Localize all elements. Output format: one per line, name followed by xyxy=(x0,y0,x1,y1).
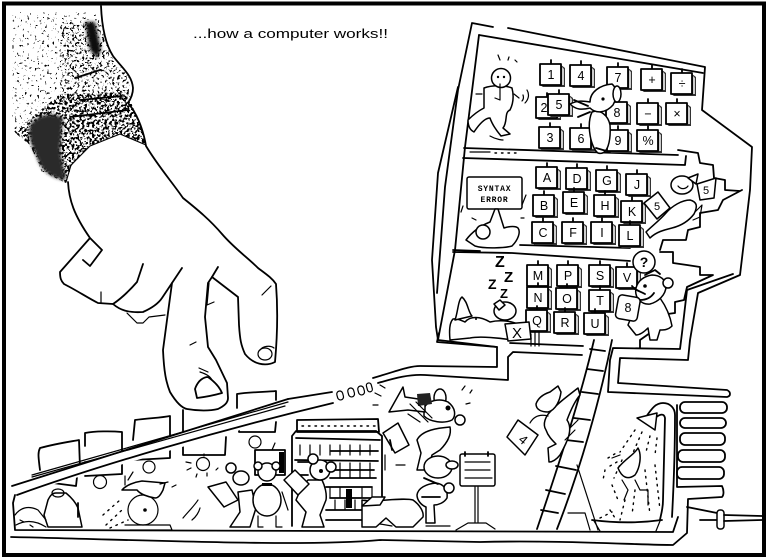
panel: middle room letter keys xyxy=(532,163,651,248)
key R: R xyxy=(560,316,570,330)
key 2 xyxy=(85,431,122,476)
panel: lower room letter keys xyxy=(526,261,641,336)
key O: O xyxy=(562,292,572,306)
key Q: Q xyxy=(532,314,542,328)
character: mouse with clipboard on the left of trumpeter xyxy=(383,423,409,470)
number key 7: 7 xyxy=(615,71,622,85)
slope band mask xyxy=(12,392,333,495)
minus key: − xyxy=(644,107,652,121)
number key 6: 6 xyxy=(578,132,585,146)
index finger xyxy=(163,277,228,410)
hand outline xyxy=(101,6,277,364)
panel: keyboard slope with keys xyxy=(12,382,373,495)
key V: V xyxy=(623,271,632,285)
key S: S xyxy=(596,269,604,283)
key D: D xyxy=(572,172,582,186)
character: mouse with book in front of bookcase xyxy=(284,454,336,527)
sleeping Zs: Z xyxy=(488,276,497,292)
character: mouse on ladder carrying clipboard xyxy=(507,386,580,462)
shelf 2 xyxy=(453,245,630,261)
character: mouse running up stairs with clipboards: 5 xyxy=(703,185,709,197)
key L: L xyxy=(627,229,634,243)
floor shelf 1 xyxy=(463,148,686,165)
key F: F xyxy=(569,226,577,240)
number key 4: 4 xyxy=(578,69,585,83)
radiator fins xyxy=(11,402,727,545)
key N: N xyxy=(533,291,543,305)
key C: C xyxy=(538,226,548,240)
title: ...how a computer works!! xyxy=(193,26,388,41)
sleeping Zs: Z xyxy=(504,269,513,286)
sleeping Zs: Z xyxy=(500,286,508,301)
key 5 xyxy=(237,391,276,432)
number key 8: 8 xyxy=(614,106,621,120)
number key 8 xyxy=(606,98,631,125)
sleeping Zs xyxy=(488,254,513,301)
ladder xyxy=(537,340,612,530)
multiply key: × xyxy=(673,107,681,121)
icon: giant hand pressing a key xyxy=(12,6,277,410)
key P: P xyxy=(564,269,572,283)
bulbs under keys xyxy=(94,436,261,488)
monitor on stand xyxy=(255,443,285,475)
character: mouse in hat under trumpeter xyxy=(417,456,458,526)
bathtub xyxy=(592,520,662,531)
key U: U xyxy=(590,317,600,331)
character: sleeping person xyxy=(450,297,520,340)
key 1 xyxy=(38,440,80,486)
character: left pile figure xyxy=(15,489,82,527)
character: kneeling figure under stack xyxy=(362,497,423,527)
key J: J xyxy=(634,178,640,192)
percent key: % xyxy=(642,134,654,148)
panel: top room number keys xyxy=(536,60,696,153)
key A: A xyxy=(543,171,552,185)
key G: G xyxy=(602,174,612,188)
key K: K xyxy=(628,205,637,219)
character: puzzled mouse with question bubble xyxy=(615,251,673,340)
number key 7 xyxy=(607,63,632,90)
number key 9 xyxy=(607,126,632,153)
number key 5: 5 xyxy=(556,98,563,112)
key M: M xyxy=(533,269,543,283)
key T: T xyxy=(596,294,604,308)
divide key: ÷ xyxy=(679,77,686,91)
character: puzzled mouse with question bubble: ? xyxy=(640,254,648,270)
character: round-bellied figure xyxy=(103,472,200,530)
number key 5 xyxy=(548,90,573,117)
shower pipe and head xyxy=(600,403,675,520)
sign: SYNTAX ERROR xyxy=(467,177,522,209)
bookcase with sign and shelves xyxy=(292,419,382,526)
number key 3: 3 xyxy=(547,131,554,145)
character: round mouse, centre xyxy=(253,462,288,527)
minus key xyxy=(637,99,662,126)
percent key xyxy=(637,126,662,153)
key 4 xyxy=(183,410,226,455)
number key 2 xyxy=(536,93,561,120)
number key 1: 1 xyxy=(548,68,555,82)
character: mouse pressing number keys xyxy=(570,84,621,153)
divide key xyxy=(671,69,696,96)
character: mouse showering xyxy=(608,448,648,505)
multiply key xyxy=(666,99,691,126)
power plug and cable xyxy=(687,507,762,529)
character: puzzled mouse with question bubble: 8 xyxy=(625,301,632,315)
character: mouse running up stairs with clipboards: 5 xyxy=(654,201,660,213)
sleeping Zs: Z xyxy=(495,254,505,271)
key 3 xyxy=(133,416,170,460)
sleeve texture xyxy=(12,12,147,183)
character: fallen person holding sign xyxy=(461,195,526,248)
key I: I xyxy=(600,226,604,240)
key E: E xyxy=(570,196,578,210)
plus key: + xyxy=(648,73,656,87)
number key 1 xyxy=(540,60,565,87)
sign: SYNTAX ERROR: SYNTAX xyxy=(478,185,511,194)
floor and left wall xyxy=(13,495,678,532)
panel: computer wall outline xyxy=(373,23,752,397)
sign: SYNTAX ERROR: ERROR xyxy=(480,196,509,205)
number key 2: 2 xyxy=(541,101,548,115)
character: mouse on ladder carrying clipboard: 4 xyxy=(516,432,531,448)
box marked X xyxy=(505,322,539,346)
character: man sitting in top room xyxy=(468,55,528,140)
key B: B xyxy=(540,199,548,213)
character: mouse running up stairs with clipboards xyxy=(644,174,716,238)
plus key xyxy=(641,65,666,92)
box marked X: X xyxy=(512,325,522,342)
key H: H xyxy=(600,199,610,213)
small dashes in the wire xyxy=(336,382,373,401)
number key 6 xyxy=(570,124,595,151)
sign on post xyxy=(456,452,495,530)
character: mouse blowing trumpet xyxy=(373,385,472,470)
number key 9: 9 xyxy=(615,134,622,148)
number key 4 xyxy=(570,61,595,88)
slanted board xyxy=(12,399,288,486)
number key 3 xyxy=(539,123,564,150)
staircases xyxy=(640,150,742,348)
character: mouse with book, left xyxy=(208,463,256,527)
